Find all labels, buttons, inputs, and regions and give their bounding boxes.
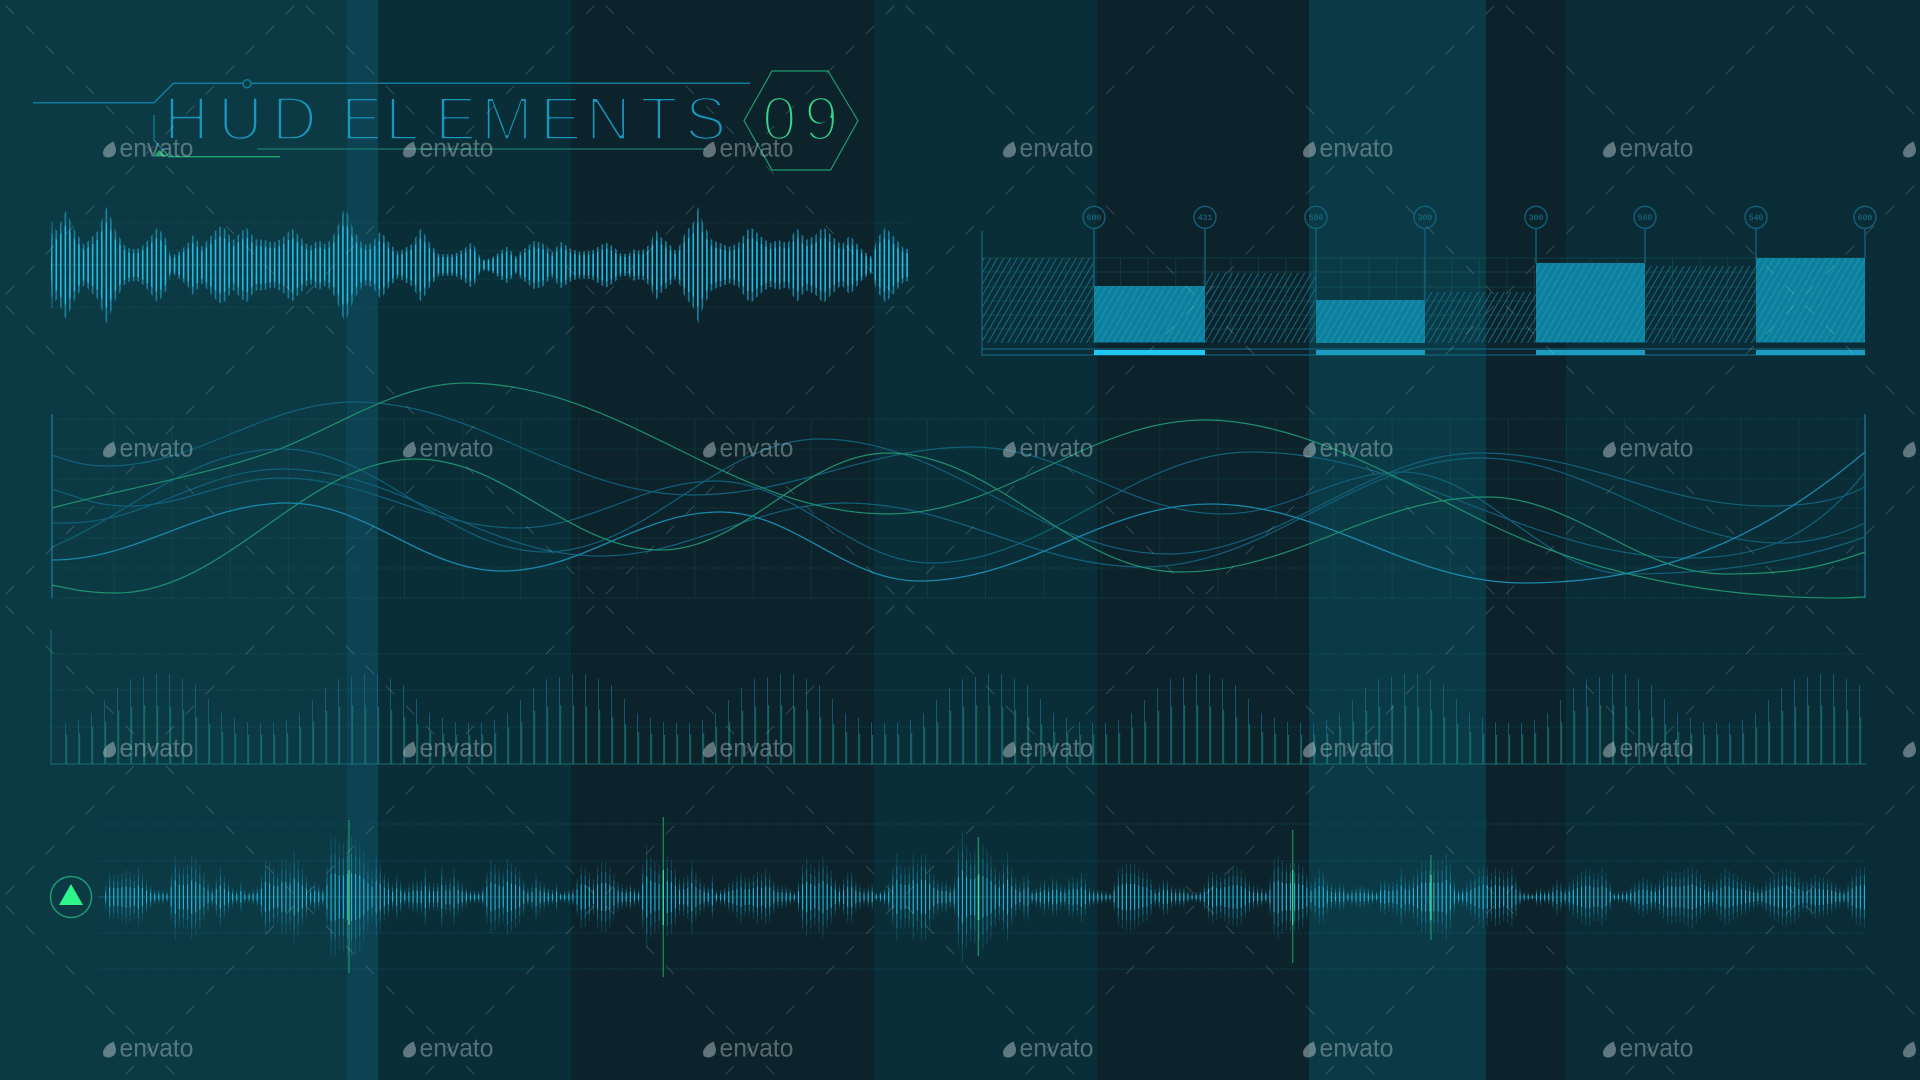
envato watermarks: envato	[120, 433, 194, 463]
pin circles	[1083, 206, 1876, 228]
chart side axes	[52, 414, 1865, 598]
green bars	[60, 660, 1868, 764]
envato watermarks: envato	[1320, 733, 1394, 763]
dim rule under title	[257, 148, 706, 150]
envato watermarks: envato	[420, 733, 494, 763]
pin values: 600	[1087, 214, 1101, 223]
envato watermarks: envato	[720, 1033, 794, 1063]
green spike cores	[349, 870, 1431, 925]
hexagon badge	[744, 71, 858, 170]
envato watermarks: envato	[1620, 1033, 1694, 1063]
envato watermarks: envato	[720, 433, 794, 463]
pin values: 560	[1638, 214, 1652, 223]
envato watermarks: envato	[1620, 433, 1694, 463]
baseline highlights	[1094, 350, 1865, 355]
pin values: 300	[1418, 214, 1432, 223]
spectrum axis	[51, 630, 1866, 764]
envato watermarks: envato	[1620, 733, 1694, 763]
node on circuit line	[243, 80, 251, 88]
waveform bright layer	[105, 870, 1865, 924]
envato watermarks: envato	[1620, 133, 1694, 163]
waveform centre line	[98, 896, 1866, 898]
pin values: 300	[1529, 214, 1543, 223]
envato watermarks: envato	[120, 733, 194, 763]
blue bars	[60, 660, 1872, 764]
left bracket	[154, 115, 163, 150]
pin values	[1087, 214, 1872, 223]
pin values: 600	[1858, 214, 1872, 223]
chart grid	[982, 258, 1865, 329]
envato watermarks: envato	[1320, 133, 1394, 163]
envato watermarks: envato	[720, 733, 794, 763]
line chart grid	[52, 419, 1865, 598]
spectrum bars	[51, 630, 1872, 764]
circuit line above title	[33, 83, 750, 103]
pin values: 500	[1309, 214, 1323, 223]
hatched bars	[982, 258, 1756, 343]
envato watermarks: envato	[1320, 1033, 1394, 1063]
envato watermarks: envato	[1020, 133, 1094, 163]
wave line chart	[52, 383, 1865, 598]
bright blue curve	[52, 452, 1865, 583]
badge number: 09	[762, 85, 838, 154]
bar chart with pins	[982, 206, 1876, 356]
green underline	[163, 150, 280, 157]
title block: HUD ELEMENTS 09	[33, 71, 858, 170]
waveform guides	[98, 824, 1866, 969]
envato watermarks: envato	[420, 433, 494, 463]
pin values: 431	[1198, 214, 1212, 223]
envato watermarks: envato	[120, 133, 194, 163]
envato watermarks: envato	[1020, 433, 1094, 463]
envato watermarks: envato	[420, 1033, 494, 1063]
pin values: 540	[1749, 214, 1763, 223]
envato watermarks: envato	[1320, 433, 1394, 463]
top waveform	[50, 223, 909, 307]
waveform dim layer	[105, 830, 1865, 964]
envato watermarks: envato	[1020, 733, 1094, 763]
title text: HUD ELEMENTS	[164, 85, 726, 154]
spectrum grid	[51, 654, 1866, 727]
icon: play triangle in ring	[50, 876, 92, 918]
pin stems	[1094, 229, 1865, 300]
bottom waveform	[50, 817, 1867, 977]
green corner triangle	[154, 150, 166, 156]
chart axis and baseline	[982, 231, 1865, 356]
solid bars	[1094, 258, 1865, 343]
waveform mid layer	[105, 848, 1865, 946]
dim blue curves	[52, 402, 1865, 574]
envato watermarks: envato	[120, 1033, 194, 1063]
green spikes	[349, 817, 1431, 977]
envato watermarks: envato	[720, 133, 794, 163]
green curves	[52, 383, 1865, 598]
envato watermarks: envato	[1020, 1033, 1094, 1063]
envato watermarks: envato	[420, 133, 494, 163]
